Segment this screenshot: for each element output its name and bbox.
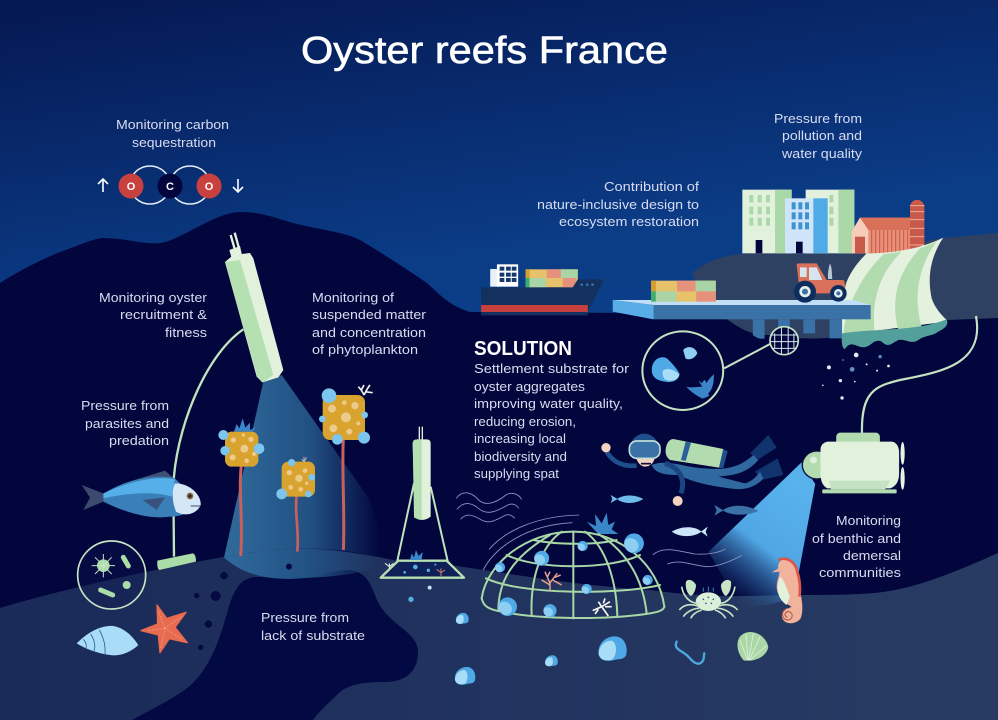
seaweed on dome [587, 513, 618, 534]
carbon sequestration label: sequestration [132, 135, 216, 150]
monitoring oyster recruitment label: fitness [165, 325, 207, 340]
nature-inclusive design label: nature-inclusive design to [537, 197, 699, 212]
diver and small fish [601, 434, 783, 537]
small fish B [714, 505, 758, 516]
icon: CO2 molecule with arrows: C [166, 181, 174, 193]
icon: CO2 molecule with arrows [98, 166, 243, 204]
magnified substrate inset [642, 327, 798, 410]
bottom creatures [676, 558, 802, 664]
title: Oyster reefs France [301, 30, 668, 72]
ROV light beam [709, 463, 815, 607]
container ship [481, 264, 604, 315]
benthic and demersal label: Monitoring [836, 513, 901, 528]
seabed creatures left [77, 564, 292, 655]
sensor cable [173, 329, 243, 557]
parasites and predation label: Pressure from [81, 398, 169, 413]
solution text: supplying spat [474, 466, 559, 481]
crab [679, 580, 738, 618]
dome frame [482, 532, 664, 618]
benthic and demersal label: communities [819, 565, 901, 580]
deep substrate gap [132, 570, 418, 720]
reef dome [482, 513, 664, 618]
suspended matter label: suspended matter [312, 307, 427, 322]
diver [601, 434, 783, 506]
fish [82, 471, 201, 517]
sensor base [157, 553, 196, 570]
sensor light beam [224, 375, 388, 562]
suspended matter label: of phytoplankton [312, 342, 418, 357]
scallop [737, 632, 768, 661]
pier, ship, containers and inset [481, 264, 890, 410]
striped field runoff [842, 238, 947, 349]
land under the town [692, 233, 998, 338]
monitoring oyster recruitment label: recruitment & [120, 307, 207, 322]
farm and silo [852, 200, 924, 253]
parasites and predation label: parasites and [85, 416, 169, 431]
pressure from pollution label: water quality [781, 146, 862, 161]
monitoring oyster recruitment label: Monitoring oyster [99, 290, 208, 305]
pier [613, 300, 871, 339]
reef cube 1 on stalk [218, 418, 264, 556]
seabed [0, 549, 998, 720]
nature-inclusive design label: Contribution of [604, 179, 699, 194]
lack of substrate label: Pressure from [261, 610, 349, 625]
dark sea body [0, 212, 998, 720]
suspended matter label: Monitoring of [312, 290, 394, 305]
small fish A [611, 495, 643, 503]
sediment dots [194, 564, 292, 650]
oysters on dome [495, 533, 653, 617]
nature-inclusive design label: ecosystem restoration [559, 214, 699, 229]
benthic and demersal label: demersal [843, 548, 901, 563]
coral white [593, 598, 612, 616]
sea snail shell [77, 626, 138, 655]
microbes inset [78, 541, 146, 609]
seahorse [772, 558, 802, 623]
reef cube 2 on stalk [276, 457, 315, 552]
solution text: oyster aggregates [474, 379, 585, 394]
scattered oysters [455, 613, 627, 685]
left monitoring scene [78, 233, 464, 609]
stacked containers [651, 281, 716, 302]
icon: CO2 molecule with arrows: O [127, 181, 136, 193]
floating sensor [225, 233, 283, 382]
reef cube 3 on stalk [319, 385, 373, 550]
icon: CO2 molecule with arrows: O [205, 181, 214, 193]
solution text: Settlement substrate for [474, 361, 630, 376]
pressure from pollution label: pollution and [782, 128, 862, 143]
suspended matter label: and concentration [312, 325, 426, 340]
solution text: increasing local [474, 431, 566, 446]
ROV underwater vehicle [802, 433, 905, 493]
pressure from pollution label: Pressure from [774, 111, 862, 126]
pollution particles [822, 353, 890, 400]
starfish [141, 605, 187, 653]
benthic and demersal label: of benthic and [812, 531, 901, 546]
solution text: biodiversity and [474, 449, 567, 464]
solution heading: SOLUTION [474, 338, 572, 360]
small fish C [672, 527, 708, 537]
cable to ROV [862, 316, 977, 433]
reef scene on the right [455, 433, 905, 685]
worm [676, 642, 704, 664]
coral pink [542, 572, 562, 591]
small sensor on tripod frame [381, 427, 464, 602]
coast: town, farm, field [742, 190, 947, 349]
carbon sequestration label: Monitoring carbon [116, 117, 229, 132]
lack of substrate label: lack of substrate [261, 628, 365, 643]
solution text: improving water quality, [474, 396, 623, 411]
seabed glow [224, 549, 388, 579]
tractor [794, 263, 847, 303]
buildings [742, 190, 854, 253]
current lines [456, 493, 742, 570]
solution text: reducing erosion, [474, 414, 576, 429]
parasites and predation label: predation [109, 433, 169, 448]
